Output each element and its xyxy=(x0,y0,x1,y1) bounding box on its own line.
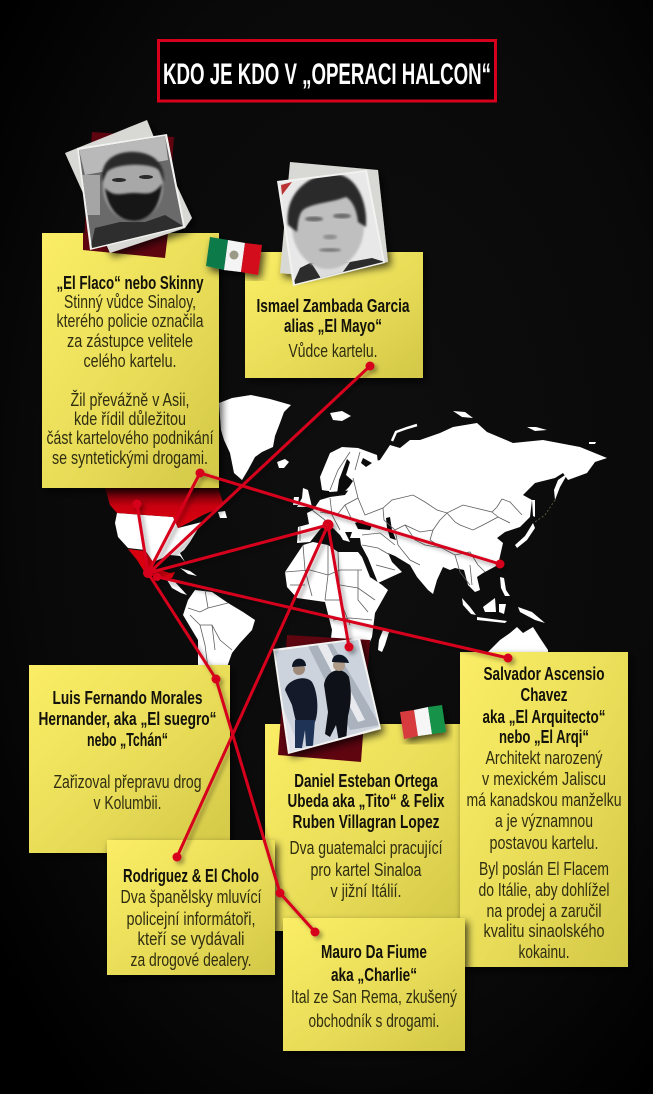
panel: Mauro Da Fiume xyxy=(283,918,465,1051)
photo: Daniel Ortega and Felix Villagran xyxy=(270,635,385,762)
Philippines xyxy=(500,577,510,596)
panel: Daniel Esteban Ortega and Felix Ruben Villagran Lopez xyxy=(265,724,463,931)
Borneo xyxy=(483,598,496,612)
White Sea xyxy=(361,458,372,467)
panel: Luis Fernando Morales xyxy=(29,665,230,853)
panel: Salvador Ascensio Chavez: v mexickém Jaliscu xyxy=(482,768,606,789)
panel: El Flaco xyxy=(42,132,219,488)
South America xyxy=(205,590,228,608)
New Guinea xyxy=(518,607,545,623)
Madagascar xyxy=(378,630,389,652)
Eurasia xyxy=(297,423,607,594)
panel: Rodriguez and El Cholo: kteří se vydávali xyxy=(138,928,244,949)
Ireland xyxy=(293,497,299,505)
panel: Daniel Esteban Ortega and Felix Ruben Villagran Lopez: pro kartel Sinaloa xyxy=(310,859,422,880)
Central America xyxy=(167,580,187,595)
Sakhalin xyxy=(532,500,535,517)
panel: El Flaco: za zástupce velitele xyxy=(67,330,193,351)
Cuba xyxy=(180,568,197,576)
Sumatra xyxy=(462,598,476,615)
panel: El Flaco: se syntetickými drogami. xyxy=(52,447,208,468)
panel: Salvador Ascensio Chavez: Architekt narozený xyxy=(486,747,603,768)
panel: Luis Fernando Morales: Luis Fernando Morales xyxy=(52,687,202,708)
United Kingdom xyxy=(297,488,312,507)
title xyxy=(158,40,496,101)
Kazakhstan south border xyxy=(383,508,447,532)
connection lines xyxy=(132,362,512,936)
USA xyxy=(115,513,202,562)
Newfoundland xyxy=(218,511,227,518)
panel: El Flaco: kde řídil důležitou xyxy=(74,408,186,429)
South America xyxy=(183,590,255,670)
Africa xyxy=(285,570,362,575)
panel: Salvador Ascensio Chavez: aka „El Arquitecto“ xyxy=(482,706,606,727)
Australia xyxy=(488,627,548,660)
Svalbard xyxy=(330,411,351,421)
Wrangel Island xyxy=(589,442,596,444)
panel: Rodriguez and El Cholo: policejní informátoři, xyxy=(126,908,256,929)
Greenland xyxy=(219,395,291,480)
panel: Salvador Ascensio Chavez xyxy=(460,652,628,967)
panel: Luis Fernando Morales: Hernander, aka „El suegro“ xyxy=(38,708,216,729)
Africa xyxy=(285,542,388,646)
Southeast Asia xyxy=(455,555,470,585)
panel: Salvador Ascensio Chavez: do Itálie, aby dohlížel xyxy=(478,879,610,900)
Nordic borders xyxy=(330,452,350,490)
Europe xyxy=(320,498,358,515)
panel: Daniel Esteban Ortega and Felix Ruben Villagran Lopez: Dva guatemalci pracující xyxy=(290,837,443,858)
world map xyxy=(105,395,607,670)
New Siberian Islands xyxy=(527,427,547,431)
Severnaya Zemlya xyxy=(453,411,473,418)
panel: Rodriguez and El Cholo: Rodriguez & El Cholo xyxy=(123,865,259,886)
panel: Salvador Ascensio Chavez: Byl poslán El Flacem xyxy=(479,858,609,879)
photo: El Flaco xyxy=(65,120,192,255)
Iceland xyxy=(277,459,289,468)
Caspian Sea xyxy=(386,517,396,540)
panel: Salvador Ascensio Chavez: Chavez xyxy=(520,684,568,705)
Scandinavia xyxy=(320,447,378,492)
panel: Salvador Ascensio Chavez: nebo „El Arqi“ xyxy=(499,726,589,747)
Russia south border xyxy=(353,478,522,515)
panel: El Flaco: celého kartelu. xyxy=(84,350,176,371)
panel: Luis Fernando Morales: Zařizoval přepravu drog xyxy=(54,771,202,792)
Central Asia and Iran xyxy=(395,530,420,565)
panel: Daniel Esteban Ortega and Felix Ruben Villagran Lopez: Daniel Esteban Ortega xyxy=(294,770,438,791)
panel: Daniel Esteban Ortega and Felix Ruben Villagran Lopez: v jižní Itálií. xyxy=(330,880,402,901)
panel: Mauro Da Fiume: Ital ze San Rema, zkušený xyxy=(291,986,458,1007)
panel: Ismael Zambada Garcia: alias „El Mayo“ xyxy=(284,315,382,336)
Gulf of Bothnia and Baltic Sea xyxy=(337,459,353,494)
Java and Timor chain xyxy=(477,617,507,623)
Kuril arc xyxy=(535,500,555,522)
panel: Salvador Ascensio Chavez: na prodej a zaručil xyxy=(486,900,602,921)
panel: El Flaco: Stinný vůdce Sinaloy, xyxy=(64,291,196,312)
panel: El Flaco: část kartelového podnikání xyxy=(46,427,214,448)
Canada highlighted xyxy=(105,488,223,528)
panel: Daniel Esteban Ortega and Felix Ruben Villagran Lopez: Ruben Villagran Lopez xyxy=(292,811,440,832)
Arabia xyxy=(362,545,390,555)
inland seas xyxy=(320,458,396,540)
panel: Mauro Da Fiume: obchodník s drogami. xyxy=(308,1010,440,1031)
Kamchatka xyxy=(554,473,568,500)
Kattegat xyxy=(320,490,330,498)
panel: El Flaco: „El Flaco“ nebo Skinny xyxy=(56,272,204,293)
panel: El Flaco: kterého policie označila xyxy=(56,310,204,331)
panel: Ismael Zambada Garcia xyxy=(245,252,423,378)
China xyxy=(430,530,485,572)
panel: Mauro Da Fiume: Mauro Da Fiume xyxy=(321,941,427,962)
Sulawesi xyxy=(499,604,506,614)
Mongolia xyxy=(447,512,498,530)
panel: Luis Fernando Morales: v Kolumbii. xyxy=(94,792,162,813)
panel: Daniel Esteban Ortega and Felix Ruben Villagran Lopez: Ubeda aka „Tito“ & Felix xyxy=(288,790,445,811)
panel: Salvador Ascensio Chavez: postavou kartelu. xyxy=(490,832,598,853)
Novaya Zemlya xyxy=(392,425,417,441)
panel: Ismael Zambada Garcia: Ismael Zambada Garcia xyxy=(256,295,410,316)
panel: Luis Fernando Morales: nebo „Tchán“ xyxy=(87,729,168,750)
country borders xyxy=(188,452,522,668)
panel: Salvador Ascensio Chavez: kvalitu sinaolského xyxy=(484,920,604,941)
panel: El Flaco: Žil převážně v Asii, xyxy=(70,389,190,410)
photo: Ismael Zambada xyxy=(270,162,390,290)
icon: Mexican flag xyxy=(206,237,262,275)
panel: Salvador Ascensio Chavez: Salvador Ascensio xyxy=(484,663,604,684)
icon: Italian flag xyxy=(400,705,446,739)
Japan xyxy=(515,523,535,548)
panel: Rodriguez and El Cholo xyxy=(107,840,275,975)
panel: Salvador Ascensio Chavez: a je významnou xyxy=(495,810,593,831)
Mexico highlighted xyxy=(128,549,175,578)
panel: Ismael Zambada Garcia: Vůdce kartelu. xyxy=(288,340,378,361)
panel: Mauro Da Fiume: aka „Charlie“ xyxy=(331,964,417,985)
panel: Rodriguez and El Cholo: za drogové dealery. xyxy=(130,949,252,970)
panel: Salvador Ascensio Chavez: kokainu. xyxy=(518,941,570,962)
panel: Rodriguez and El Cholo: Dva španělsky mluvící xyxy=(120,886,262,907)
Black Sea xyxy=(355,520,372,530)
